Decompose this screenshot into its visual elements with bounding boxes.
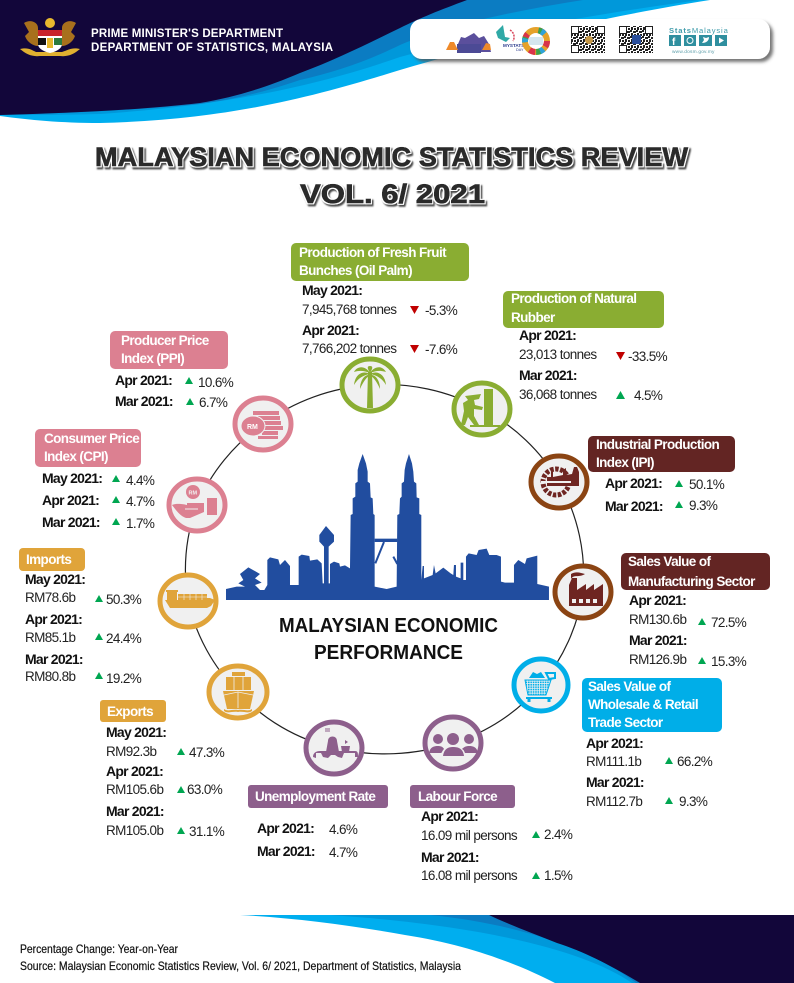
panel: natural rubber: Mar 2021: (519, 367, 577, 383)
panel: manufacturing sector: Manufacturing Sector (628, 574, 756, 589)
panel: industrial production index: 50.1% (689, 477, 725, 492)
panel: wholesale and retail trade: 66.2% (677, 754, 713, 769)
central heading: MALAYSIAN ECONOMIC (279, 615, 498, 637)
icon: unemployed person at desk (306, 722, 362, 774)
StatsMalaysia social block: www.dosm.gov.my (672, 49, 715, 55)
header organisation text: PRIME MINISTER'S DEPARTMENT (91, 28, 283, 40)
panel: unemployment rate (248, 785, 388, 860)
panel: exports: RM105.6b (106, 782, 163, 797)
skyline of Kuala Lumpur (226, 454, 549, 600)
panel: natural rubber: Apr 2021: (519, 327, 576, 343)
panel: exports: Mar 2021: (106, 803, 164, 819)
title (95, 142, 689, 209)
panel: labour force: Labour Force (418, 789, 498, 804)
panel: natural rubber: Production of Natural (511, 291, 636, 306)
panel: consumer price index: 4.7% (126, 494, 155, 509)
panel: imports: Apr 2021: (25, 611, 82, 627)
panel: exports: Exports (107, 704, 153, 719)
footer banner (240, 915, 794, 983)
footer notes: Percentage Change: Year-on-Year (20, 942, 178, 956)
panel: wholesale and retail trade: RM112.7b (586, 794, 642, 809)
panel: manufacturing sector: 15.3% (711, 654, 747, 669)
footer notes (20, 942, 461, 973)
panel: natural rubber: 36,068 tonnes (519, 387, 597, 402)
panel: unemployment rate: Unemployment Rate (255, 789, 376, 804)
panel: unemployment rate: Mar 2021: (257, 843, 315, 859)
header organisation text (91, 28, 333, 54)
panel: imports (19, 548, 142, 686)
icon: industrial gear (531, 456, 587, 508)
panel: exports: May 2021: (106, 724, 166, 740)
panel: consumer price index: 1.7% (126, 516, 155, 531)
panel: unemployment rate: Apr 2021: (257, 820, 314, 836)
panel: industrial production index: Apr 2021: (605, 475, 662, 491)
panel: consumer price index: Mar 2021: (42, 514, 100, 530)
panel: natural rubber: 4.5% (634, 388, 663, 403)
panel: producer price index: Producer Price (121, 333, 210, 348)
footer notes: Source: Malaysian Economic Statistics Review, Vol. 6/ 2021, Department of Statistics, Malaysia (20, 959, 461, 973)
panel: imports: 50.3% (106, 592, 142, 607)
panel: industrial production index: Industrial Production (596, 437, 720, 452)
panel: manufacturing sector: RM130.6b (629, 612, 686, 627)
panel: natural rubber: Rubber (511, 310, 556, 325)
panel: imports: Mar 2021: (25, 651, 83, 667)
title: VOL. 6/ 2021 (300, 179, 485, 209)
panel: industrial production index: 9.3% (689, 498, 718, 513)
panel: fresh fruit bunches: 7,945,768 tonnes (302, 302, 397, 317)
panel: fresh fruit bunches: Production of Fresh Fruit (299, 245, 447, 260)
StatsMalaysia social block: StatsMalaysia (669, 26, 729, 35)
icon: MyStats Day logo: MYSTATS (503, 43, 524, 48)
panel: labour force: 16.09 mil persons (421, 828, 518, 843)
panel: exports: RM92.3b (106, 744, 157, 759)
panel: producer price index: Apr 2021: (115, 372, 172, 388)
icon: hand with RM coin: RM (188, 490, 197, 496)
panel: exports: 31.1% (189, 824, 225, 839)
panel: fresh fruit bunches: -5.3% (425, 303, 458, 318)
panel: industrial production index (588, 436, 735, 514)
panel: natural rubber: -33.5% (628, 349, 668, 364)
panel: manufacturing sector: Sales Value of (628, 554, 711, 569)
icon: QR code two (619, 26, 653, 53)
panel: manufacturing sector (621, 553, 770, 669)
icon: stacked RM coins: RM (247, 424, 258, 431)
panel: producer price index: 10.6% (198, 375, 234, 390)
StatsMalaysia social block (669, 26, 729, 55)
panel: exports: 63.0% (187, 782, 223, 797)
panel: wholesale and retail trade: 9.3% (679, 794, 708, 809)
panel: fresh fruit bunches: 7,766,202 tonnes (302, 341, 397, 356)
panel: wholesale and retail trade: Wholesale & Retail (588, 697, 698, 712)
panel: producer price index (110, 331, 234, 410)
icon: census logo (446, 33, 491, 53)
panel: industrial production index: Index (IPI) (596, 455, 654, 470)
panel: producer price index: 6.7% (199, 395, 228, 410)
panel: wholesale and retail trade (582, 678, 722, 809)
panel: imports: RM78.6b (25, 590, 76, 605)
panel: labour force (410, 785, 573, 883)
panel: wholesale and retail trade: Trade Sector (588, 715, 664, 730)
panel: consumer price index: Apr 2021: (42, 492, 99, 508)
panel: exports: 47.3% (189, 745, 225, 760)
panel: fresh fruit bunches: Apr 2021: (302, 322, 359, 338)
panel: wholesale and retail trade: Apr 2021: (586, 735, 643, 751)
panel: consumer price index: 4.4% (126, 473, 155, 488)
panel: imports: May 2021: (25, 571, 85, 587)
title: MALAYSIAN ECONOMIC STATISTICS REVIEW (95, 142, 689, 172)
panel: unemployment rate: 4.7% (329, 845, 358, 860)
panel: manufacturing sector: Apr 2021: (629, 592, 686, 608)
icon: SDG wheel (525, 30, 547, 52)
central heading: PERFORMANCE (314, 642, 463, 664)
central heading (279, 615, 498, 664)
panel: natural rubber (503, 291, 668, 403)
panel: labour force: Mar 2021: (421, 849, 479, 865)
header organisation text: DEPARTMENT OF STATISTICS, MALAYSIA (91, 42, 333, 54)
icon: MyStats Day logo (496, 25, 524, 52)
panel: unemployment rate: 4.6% (329, 822, 358, 837)
panel: fresh fruit bunches (291, 243, 469, 357)
panel: producer price index: Mar 2021: (115, 393, 173, 409)
panel: industrial production index: Mar 2021: (605, 498, 663, 514)
panel: imports: 24.4% (106, 631, 142, 646)
icon: shopping cart (514, 659, 568, 711)
icon: oil palm (342, 359, 398, 411)
panel: exports: RM105.0b (106, 823, 163, 838)
panel: manufacturing sector: Mar 2021: (629, 632, 687, 648)
panel: fresh fruit bunches: Bunches (Oil Palm) (299, 263, 412, 278)
panel: exports: Apr 2021: (106, 763, 163, 779)
panel: labour force: Apr 2021: (421, 808, 478, 824)
panel: consumer price index: Consumer Price (44, 431, 140, 446)
panel: natural rubber: 23,013 tonnes (519, 347, 597, 362)
panel: imports: 19.2% (106, 671, 142, 686)
panel: fresh fruit bunches: May 2021: (302, 282, 362, 298)
icon: labour force people (425, 717, 481, 769)
ring connecting the sector icons (185, 384, 584, 754)
StatsMalaysia social block: f (672, 37, 676, 48)
panel: logos and QR codes (410, 19, 770, 59)
panel: producer price index: Index (PPI) (121, 351, 184, 366)
panel: wholesale and retail trade: RM111.1b (586, 754, 641, 769)
panel: exports (100, 700, 225, 839)
icon: factory (555, 566, 611, 618)
icon: MyStats Day logo: DAY (516, 48, 524, 52)
icon: hand with RM coin (169, 479, 225, 531)
panel: labour force: 16.08 mil persons (421, 868, 518, 883)
icon: container ship front (209, 666, 267, 718)
panel: consumer price index: Index (CPI) (44, 449, 108, 464)
panel: imports: RM80.8b (25, 669, 76, 684)
panel: wholesale and retail trade: Mar 2021: (586, 774, 644, 790)
panel: wholesale and retail trade: Sales Value of (588, 679, 671, 694)
panel: fresh fruit bunches: -7.6% (425, 342, 458, 357)
panel: labour force: 1.5% (544, 868, 573, 883)
icon: rubber tapper (454, 383, 510, 435)
icon: Malaysia coat of arms (20, 18, 80, 56)
panel: labour force: 2.4% (544, 827, 573, 842)
panel: consumer price index (35, 429, 155, 531)
panel: consumer price index: May 2021: (42, 470, 102, 486)
panel: imports: Imports (26, 552, 71, 567)
icon: cargo ship side (160, 575, 216, 627)
icon: QR code one (571, 26, 605, 53)
panel: manufacturing sector: 72.5% (711, 615, 747, 630)
header banner (0, 0, 710, 123)
panel: imports: RM85.1b (25, 630, 76, 645)
icon: stacked RM coins (235, 398, 291, 450)
panel: manufacturing sector: RM126.9b (629, 652, 686, 667)
